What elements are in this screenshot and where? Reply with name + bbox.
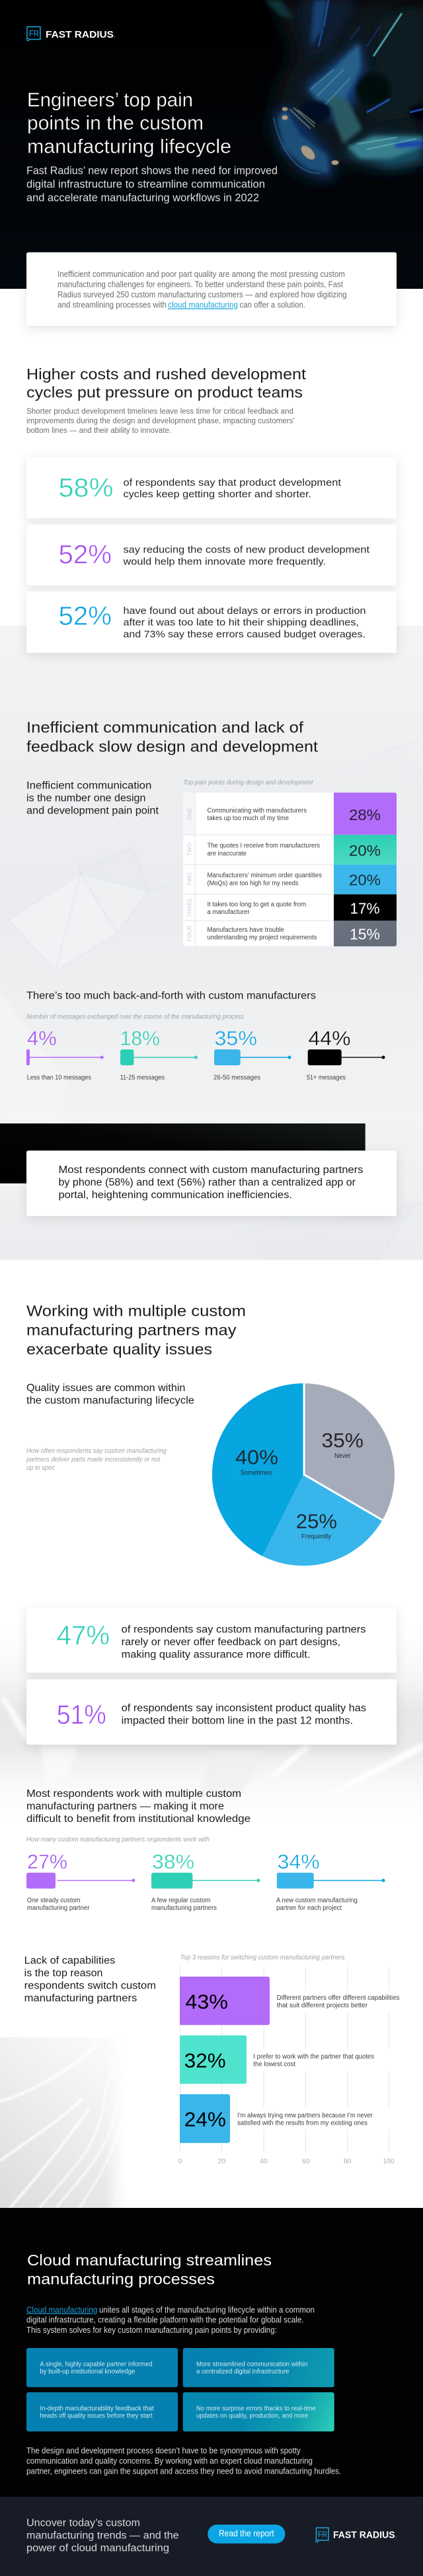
chart: new partner 34%: A new custom manufacturing: [276, 1897, 358, 1905]
chart: messages 4%: 4%: [27, 1027, 57, 1050]
stat number: 58%: [58, 474, 114, 503]
paragraph: closing: partner, engineers can gain the support and access they need to avoid manufacturing hurdles.: [26, 2466, 341, 2476]
bar: 43%: 43%: [185, 1990, 228, 2013]
heading: cloud manufacturing: Cloud manufacturing streamlines: [27, 2252, 272, 2269]
chart: new partner 34%: 34%: [278, 1850, 320, 1873]
table: pain points: [183, 792, 397, 946]
chart: a few partners 38%: 38%: [152, 1850, 194, 1873]
gray facet background: [0, 626, 423, 1260]
bar: 32%: the lowest cost: [253, 2061, 295, 2068]
subheading: lack of capabilities: is the top reason: [24, 1968, 103, 1979]
slice label: never: Never: [334, 1452, 351, 1460]
intro text: manufacturing challenges for engineers. To better understand these pain points, Fast: [58, 280, 343, 289]
row 2: TWO: [186, 843, 193, 856]
stat description: impacted their bottom line in the past 12 months.: [122, 1715, 353, 1726]
subheading: lack of capabilities: manufacturing partners: [24, 1993, 137, 2004]
intro text: [58, 270, 347, 310]
axis labels: [178, 2157, 395, 2165]
hero abstract 3D artwork: [264, 0, 423, 185]
caption: how often: [26, 1447, 167, 1472]
paragraph: cloud explanation: digital infrastructure, creating a flexible platform with the potential for global scale.: [26, 2316, 304, 2325]
slice label: never: 35%: [321, 1429, 364, 1452]
heading: inefficient communication: feedback slow design and development: [26, 738, 318, 755]
row 4: a manufacturer: [208, 909, 250, 916]
chart: one steady partner 27%: [26, 1850, 135, 1912]
heading: higher costs: Higher costs and rushed development: [26, 365, 306, 383]
panel: footer call to action: [0, 2497, 423, 2576]
row 4: [186, 898, 380, 917]
chart: messages 35%: 26-50 messages: [213, 1074, 260, 1081]
callout: phone and text: [26, 1151, 397, 1216]
stat description: have found out about delays or errors in production: [123, 606, 366, 617]
swoosh background bottom left: [0, 2037, 173, 2208]
row 2: 20%: [349, 842, 381, 859]
stat description: making quality assurance more difficult.: [122, 1649, 310, 1661]
subheading: lack of capabilities: Lack of capabilities: [24, 1955, 116, 1967]
row 3: Manufacturers’ minimum order quantities: [208, 872, 322, 880]
slice label: frequently: 25%: [296, 1509, 337, 1533]
bar: 24%: I’m always trying new partners because I’m never: [237, 2112, 373, 2119]
text backing: [233, 1990, 399, 2129]
light swoosh background: [0, 1612, 423, 1831]
heading: multiple partners: exacerbate quality issues: [26, 1341, 212, 1358]
paragraph: shorter timelines: [26, 408, 295, 435]
pie chart: quality issues: [212, 1381, 395, 1566]
footer text: Uncover today’s custom: [26, 2518, 140, 2529]
bar chart: reasons for switching: [178, 1966, 399, 2165]
heading: higher costs: [26, 365, 306, 400]
paragraph: shorter timelines: bottom lines — and their ability to innovate.: [26, 427, 171, 435]
tile: single partner: A single, highly capable partner informed: [40, 2360, 153, 2368]
bar: 43%: that suit different projects better: [277, 2002, 368, 2010]
slice label: frequently: Frequently: [301, 1533, 332, 1540]
stat number: 51%: [57, 1699, 106, 1729]
callout: phone and text: Most respondents connect with custom manufacturing partners: [58, 1164, 364, 1176]
dark banner behind callout: [0, 1123, 365, 1184]
stat description: [123, 606, 366, 640]
row 3: [186, 871, 381, 888]
row 4: 17%: [350, 900, 380, 917]
stat description: of respondents say custom manufacturing partners: [122, 1624, 366, 1636]
chart: a few partners 38%: A few regular custom: [151, 1897, 210, 1905]
logo: footer Fast Radius: .: [395, 2530, 397, 2541]
row 1: Communicating with manufacturers: [208, 807, 307, 814]
footer text: power of cloud manufacturing: [26, 2543, 169, 2554]
tile: no surprise errors: [183, 2392, 334, 2431]
stat number: 52%: [58, 541, 112, 570]
row 1: 28%: [349, 806, 381, 823]
paragraph: cloud explanation: Cloud manufacturing: [26, 2305, 97, 2314]
stat description: of respondents say that product development: [123, 478, 341, 488]
bar: 43%: Different partners offer different capabilities: [277, 1994, 399, 2002]
stat description: cycles keep getting shorter and shorter.: [123, 490, 311, 500]
intro text: Radius surveyed 250 custom manufacturing customers — and explored how digitizing: [58, 290, 347, 299]
subtitle: [26, 165, 278, 204]
logo: Fast Radius: .: [114, 29, 115, 40]
subheading: number one pain point: [26, 780, 159, 816]
paragraph: closing: The design and development process doesn’t have to be synonymous with spotty: [26, 2446, 301, 2456]
axis labels: 100: [383, 2157, 395, 2165]
stat description: [122, 1624, 366, 1661]
stat description: [122, 1702, 366, 1726]
tile: no surprise errors: No more surprise errors thanks to real-time: [196, 2404, 316, 2412]
row 2: The quotes I receive from manufacturers: [208, 843, 320, 850]
button: read the report: Read the report: [219, 2528, 274, 2538]
chart: messages 35%: 35%: [214, 1027, 257, 1050]
axis labels: 0: [178, 2157, 182, 2165]
subheading: most respondents: [26, 1788, 250, 1825]
row 5: 15%: [350, 926, 380, 943]
subtitle: Fast Radius’ new report shows the need for improved: [26, 165, 278, 176]
row 3: TWO: [186, 872, 193, 886]
tile: streamlined communication: [183, 2348, 334, 2387]
axis labels: 20: [218, 2157, 225, 2165]
heading: cloud manufacturing: [27, 2252, 272, 2288]
row 1: [186, 806, 381, 823]
row 2: [186, 842, 381, 859]
subheading: number one pain point: Inefficient communication: [26, 780, 151, 791]
subheading: most respondents: Most respondents work with multiple custom: [26, 1788, 241, 1799]
button: read the report: [208, 2524, 285, 2544]
heading: multiple partners: [26, 1303, 246, 1358]
chart: one steady partner 27%: manufacturing partner: [27, 1905, 90, 1912]
tile: manufacturability feedback: [26, 2392, 178, 2431]
logo: footer Fast Radius: [316, 2528, 397, 2542]
stat number: 47%: [57, 1620, 110, 1650]
tile: manufacturability feedback: heads off quality issues before they start: [40, 2412, 153, 2420]
subheading: quality issues: [26, 1383, 194, 1406]
panel: intro card: [26, 252, 397, 326]
caption: how often: How often respondents say custom manufacturing: [26, 1447, 167, 1455]
bar: 24%: [180, 2094, 373, 2143]
row 5: understanding my project requirements: [208, 934, 317, 942]
chart: new partner 34%: partner for each project: [276, 1905, 342, 1912]
heading: higher costs: cycles put pressure on product teams: [26, 383, 303, 400]
bar: 32%: [180, 2035, 374, 2084]
row 5: [186, 926, 380, 943]
logo: Fast Radius: [26, 26, 115, 41]
stat card: 52% innovate: [26, 525, 397, 586]
panel: cloud manufacturing: [0, 2208, 423, 2497]
caption: how often: partners deliver parts made inconsistently or not: [26, 1455, 161, 1463]
heading: inefficient communication: [26, 718, 318, 755]
row 1: takes up too much of my time: [208, 815, 289, 822]
subheading: most respondents: manufacturing partners — making it more: [26, 1801, 224, 1812]
title: points in the custom: [27, 112, 204, 134]
row 4: THREE: [186, 898, 193, 917]
subheading: lack of capabilities: respondents switch custom: [24, 1981, 156, 1992]
chart: one steady partner 27%: One steady custom: [27, 1897, 81, 1905]
row 5: FOUR: [186, 926, 193, 942]
stat card: 51%: [26, 1679, 397, 1745]
heading: cloud manufacturing: manufacturing processes: [27, 2271, 215, 2288]
row 5: Manufacturers have trouble: [208, 927, 284, 934]
footer text: manufacturing trends — and the: [26, 2530, 179, 2542]
paragraph: shorter timelines: Shorter product development timelines leave less time for critical feedback and: [26, 408, 293, 416]
caption: top 3 reasons: Top 3 reasons for switching custom manufacturing partners: [180, 1953, 345, 1961]
row 2: are inaccurate: [208, 850, 247, 857]
logo: Fast Radius: FR: [29, 28, 39, 38]
bar: 24%: 24%: [184, 2107, 226, 2131]
row 1: ONE: [186, 808, 193, 820]
tile: single partner: [26, 2348, 178, 2387]
title: Engineers’ top pain: [27, 89, 193, 111]
title: manufacturing lifecycle: [27, 136, 231, 158]
chart: messages 18%: 11-25 messages: [120, 1074, 165, 1081]
chart: one steady partner 27%: 27%: [27, 1850, 67, 1873]
stat number: 52%: [58, 602, 112, 631]
callout: phone and text: by phone (58%) and text (56%) rather than a centralized app or: [58, 1177, 356, 1188]
slice label: sometimes: 40%: [235, 1446, 278, 1469]
subtitle: and accelerate manufacturing workflows in 2022: [26, 192, 259, 204]
hero background: [0, 0, 423, 289]
logo: Fast Radius: FAST RADIUS: [46, 29, 114, 40]
paragraph: shorter timelines: improvements during the design and development phase, impacting customers’: [26, 417, 295, 425]
stat description: would help them innovate more frequently.: [122, 556, 326, 567]
bar: 32%: 32%: [184, 2049, 226, 2072]
caption: number of messages: Number of messages exchanged over the course of the manufacturing process: [26, 1012, 245, 1020]
stat description: and 73% say these errors caused budget overages.: [123, 629, 365, 640]
subheading: quality issues: the custom manufacturing lifecycle: [26, 1395, 194, 1406]
subheading: lack of capabilities: [24, 1955, 156, 2004]
stat description: rarely or never offer feedback on part designs,: [122, 1637, 340, 1648]
stat description: of respondents say inconsistent product quality has: [122, 1702, 366, 1714]
subheading: back-and-forth: There’s too much back-and-forth with custom manufacturers: [26, 991, 316, 1002]
tile: streamlined communication: a centralized digital infrastructure: [196, 2368, 289, 2376]
paragraph: cloud explanation: unites all stages of the manufacturing lifecycle within a common: [99, 2305, 315, 2314]
tile: manufacturability feedback: In-depth manufacturability feedback that: [40, 2404, 154, 2412]
subheading: number one pain point: is the number one design: [26, 792, 145, 804]
chart: messages 44%: [307, 1027, 385, 1081]
bar: 24%: satisfied with the results from my existing ones: [237, 2120, 367, 2127]
intro text: cloud manufacturing: [168, 301, 238, 310]
stat card: 58%: [26, 457, 397, 518]
subheading: quality issues: Quality issues are common within: [26, 1383, 185, 1394]
tile: no surprise errors: updates on quality, production, and more: [196, 2412, 308, 2420]
chart: messages 44%: 44%: [308, 1027, 351, 1050]
tile: single partner: by built-up institutional knowledge: [40, 2368, 135, 2376]
paragraph: closing: communication and quality concerns. By working with an expert cloud manufacturing: [26, 2456, 313, 2466]
stat description: [123, 478, 341, 500]
caption: how often: up to spec: [26, 1464, 56, 1472]
slice label: sometimes: Sometimes: [241, 1469, 272, 1477]
paragraph: closing: [26, 2446, 341, 2476]
subheading: number one pain point: and development pain point: [26, 805, 159, 816]
logo: footer Fast Radius: FAST RADIUS: [333, 2530, 395, 2541]
axis labels: 40: [260, 2157, 268, 2165]
heading: multiple partners: Working with multiple custom: [26, 1303, 246, 1320]
row 3: (MoQs) are too high for my needs: [208, 880, 299, 887]
row 3: 20%: [349, 871, 381, 888]
subheading: most respondents: difficult to benefit from institutional knowledge: [26, 1813, 250, 1825]
heading: multiple partners: manufacturing partners may: [26, 1322, 237, 1339]
bar: 32%: I prefer to work with the partner that quotes: [253, 2053, 374, 2061]
tile: streamlined communication: More streamlined communication within: [196, 2360, 307, 2368]
caption: top pain points: Top pain points during design and development: [183, 778, 313, 786]
title: [27, 89, 231, 158]
stat card: 47%: [26, 1608, 397, 1673]
chart: messages 44%: 51+ messages: [307, 1074, 346, 1081]
heading: inefficient communication: Inefficient communication and lack of: [26, 718, 304, 736]
axis labels: 60: [302, 2157, 310, 2165]
paragraph: cloud explanation: This system solves for key custom manufacturing pain points by providing:: [26, 2326, 277, 2335]
chart: messages 4%: [26, 1027, 104, 1081]
subtitle: digital infrastructure to streamline communication: [26, 178, 265, 190]
callout: phone and text: portal, heightening communication inefficiencies.: [58, 1190, 292, 1201]
chart: messages 18%: [120, 1027, 198, 1081]
axis labels: 80: [344, 2157, 352, 2165]
stat description: say reducing the costs of new product development: [123, 545, 369, 556]
footer text: [26, 2518, 179, 2554]
chart: new partner 34%: [276, 1850, 385, 1912]
intro text: can offer a solution.: [239, 301, 305, 310]
chart: a few partners 38%: [151, 1850, 260, 1912]
intro text: Inefficient communication and poor part quality are among the most pressing custom: [58, 270, 345, 279]
chart: a few partners 38%: manufacturing partners: [151, 1905, 217, 1912]
intro text: and streamlining processes with: [58, 301, 167, 310]
chart: messages 4%: Less than 10 messages: [27, 1074, 91, 1081]
stat description: [122, 545, 369, 567]
caption: how many partners: How many custom manufacturing partners respondents work with: [26, 1836, 210, 1844]
chart: messages 18%: 18%: [120, 1027, 160, 1050]
chart: messages 35%: [213, 1027, 291, 1081]
stat description: after it was too late to hit their shipping deadlines,: [123, 618, 359, 628]
paragraph: cloud explanation: [26, 2305, 315, 2335]
stat card: 52% delays: [26, 591, 397, 653]
faceted polygon artwork: [53, 848, 423, 1260]
row 4: It takes too long to get a quote from: [208, 901, 306, 909]
bar: 43%: [180, 1977, 399, 2025]
logo: footer Fast Radius: FR: [318, 2530, 327, 2539]
